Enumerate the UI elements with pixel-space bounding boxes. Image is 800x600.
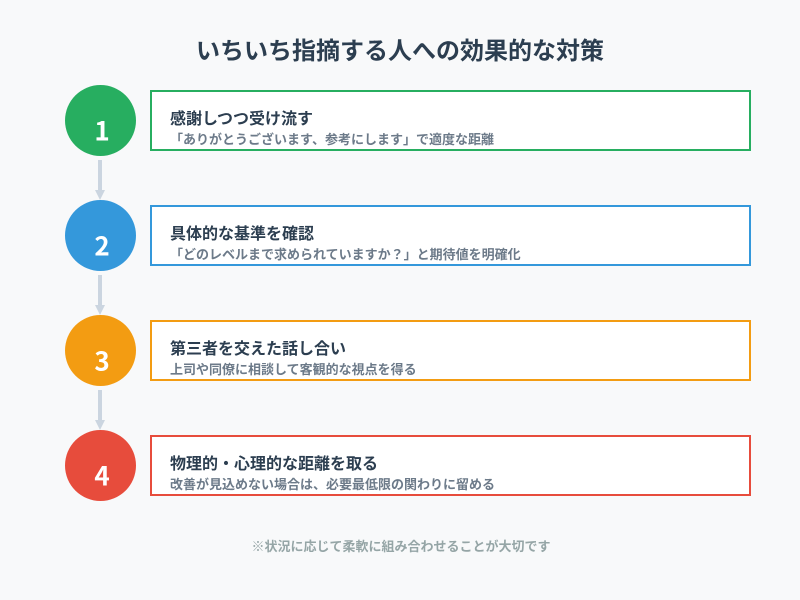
number badge 2: 2: [94, 226, 110, 264]
step 2: [65, 200, 750, 271]
number badge 1: 1: [94, 112, 110, 148]
panel: step 1: [151, 91, 750, 150]
panel: step 4: [151, 436, 750, 495]
number badge 4: 4: [94, 456, 110, 494]
number badge 4: [65, 430, 136, 501]
step 4 heading: 物理的・心理的な距離を取る: [170, 450, 378, 474]
arrow: step 1 to 2: [95, 160, 105, 200]
step 3 description: 上司や同僚に相談して客観的な視点を得る: [170, 359, 417, 378]
arrow: step 2 to 3: [95, 275, 105, 315]
step 1 heading: 感謝しつつ受け流す: [170, 105, 313, 129]
arrow: step 3 to 4: [95, 390, 105, 430]
step 1: [65, 85, 750, 156]
panel: step 3: [151, 321, 750, 380]
number badge 3: [65, 315, 136, 386]
title: いちいち指摘する人への効果的な対策: [196, 31, 604, 66]
panel: step 2: [151, 206, 750, 265]
number badge 2: [65, 200, 136, 271]
step 2 description: 「どのレベルまで求められていますか？」と期待値を明確化: [170, 244, 521, 263]
step 3: [65, 315, 750, 386]
step 2 heading: 具体的な基準を確認: [170, 220, 314, 244]
step 1 description: 「ありがとうございます、参考にします」で適度な距離: [170, 129, 494, 148]
footnote: ※状況に応じて柔軟に組み合わせることが大切です: [251, 536, 551, 555]
number badge 3: 3: [94, 342, 110, 378]
step 4 description: 改善が見込めない場合は、必要最低限の関わりに留める: [170, 474, 495, 493]
number badge 1: [65, 85, 136, 156]
step 4: [65, 430, 750, 501]
step 3 heading: 第三者を交えた話し合い: [170, 335, 346, 359]
